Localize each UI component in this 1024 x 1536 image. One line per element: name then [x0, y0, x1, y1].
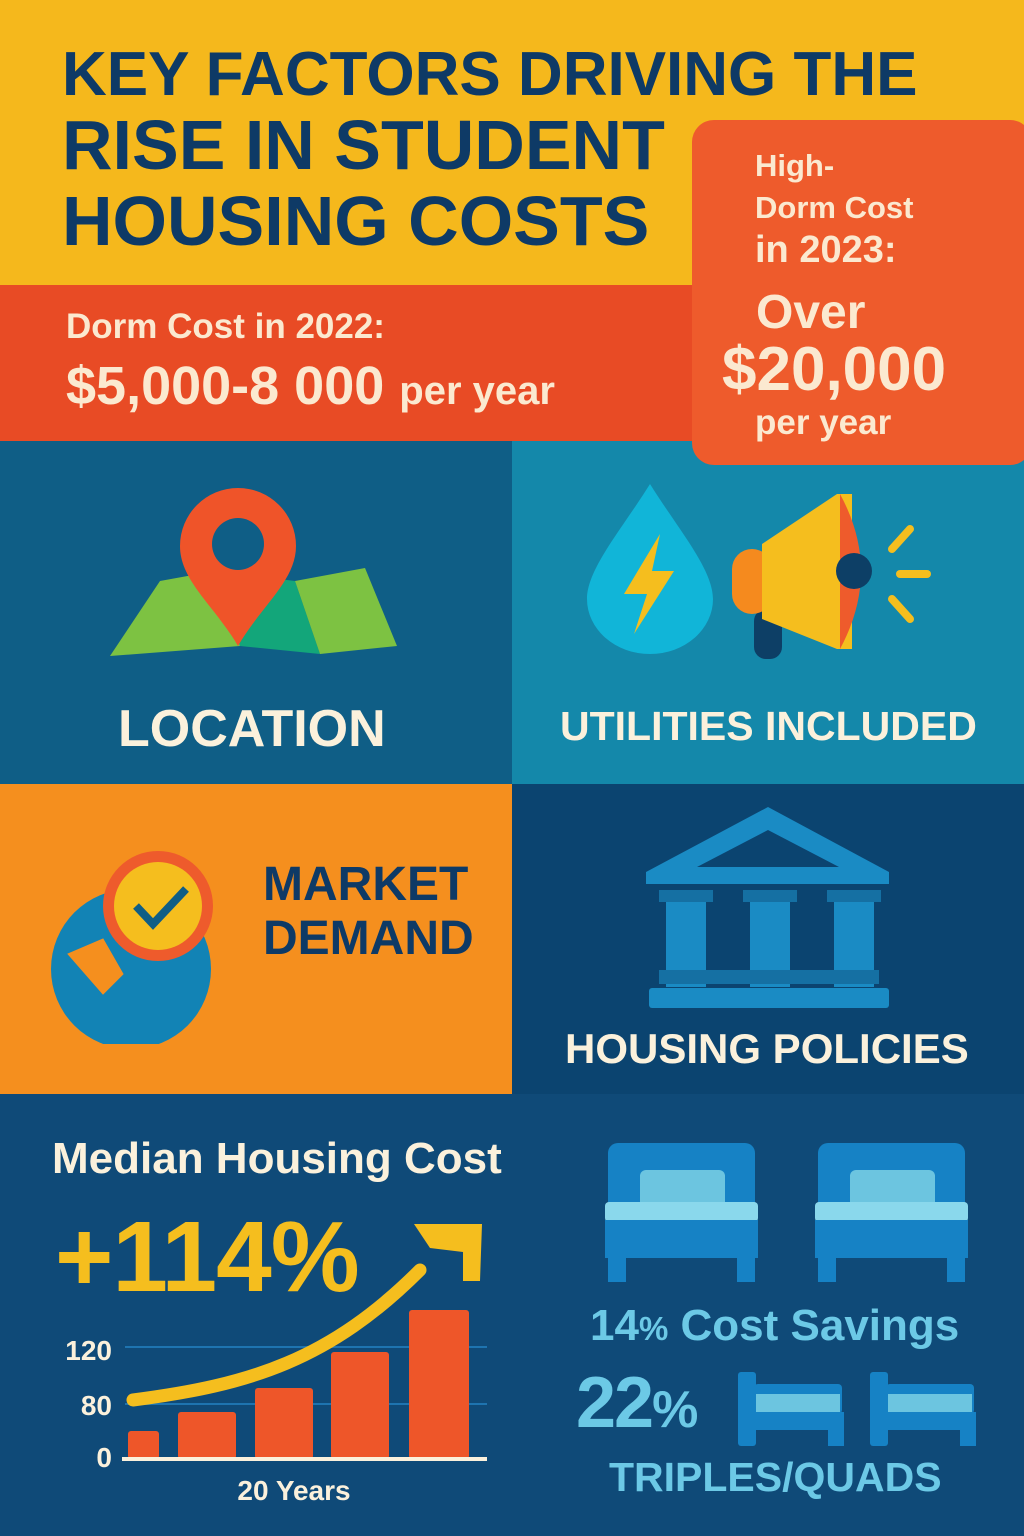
label: triples/quads: TRIPLES/QUADS	[609, 1454, 942, 1500]
stat: +114%: +114%	[55, 1201, 359, 1313]
callout: high-end dorm cost 2023: High-	[755, 148, 834, 183]
bar chart: 120	[65, 1335, 112, 1366]
icon: magnifier check	[51, 851, 213, 1044]
panel: dorm cost 2022: $5,000-8 000 per year	[66, 356, 555, 416]
header band	[0, 0, 1024, 285]
icon: water drop and megaphone	[587, 484, 931, 659]
icon: map pin	[110, 488, 397, 656]
label: market demand: MARKET	[263, 858, 468, 911]
callout: high-end dorm cost 2023: Over	[756, 286, 865, 339]
label: housing policies: HOUSING POLICIES	[565, 1025, 969, 1072]
callout: high-end dorm cost 2023	[692, 120, 1024, 465]
title: KEY FACTORS DRIVING THE	[62, 40, 918, 109]
callout: high-end dorm cost 2023: $20,000	[722, 335, 946, 404]
bar chart	[65, 1224, 487, 1506]
bar chart: 80	[81, 1390, 112, 1421]
panel: location	[0, 441, 512, 784]
title	[62, 40, 918, 260]
label: market demand: DEMAND	[263, 912, 474, 965]
title: RISE IN STUDENT	[62, 106, 665, 184]
bar chart: 0	[96, 1442, 112, 1473]
icon: two beds	[605, 1143, 968, 1282]
label: utilities included: UTILITIES INCLUDED	[560, 703, 977, 749]
bar chart: 20 Years	[237, 1475, 351, 1506]
panel: market demand	[0, 784, 512, 1094]
label: market demand	[263, 858, 474, 965]
panel: housing policies	[512, 784, 1024, 1094]
callout: high-end dorm cost 2023: in 2023:	[755, 229, 897, 271]
label: location: LOCATION	[118, 700, 386, 758]
callout: high-end dorm cost 2023: Dorm Cost	[755, 190, 913, 225]
icon: government building	[646, 807, 889, 1008]
icon: small beds	[738, 1372, 976, 1446]
stat: 14% cost savings: 14% Cost Savings	[590, 1301, 959, 1350]
callout: high-end dorm cost 2023: per year	[755, 403, 891, 442]
heading: median housing cost: Median Housing Cost	[52, 1134, 502, 1183]
panel: utilities included	[512, 441, 1024, 784]
panel: dorm cost 2022	[0, 285, 1024, 441]
stat: 22%: 22%	[576, 1363, 696, 1443]
panel: dorm cost 2022: Dorm Cost in 2022:	[66, 307, 385, 346]
title: HOUSING COSTS	[62, 182, 649, 260]
panel: bottom stats	[0, 1094, 1024, 1536]
